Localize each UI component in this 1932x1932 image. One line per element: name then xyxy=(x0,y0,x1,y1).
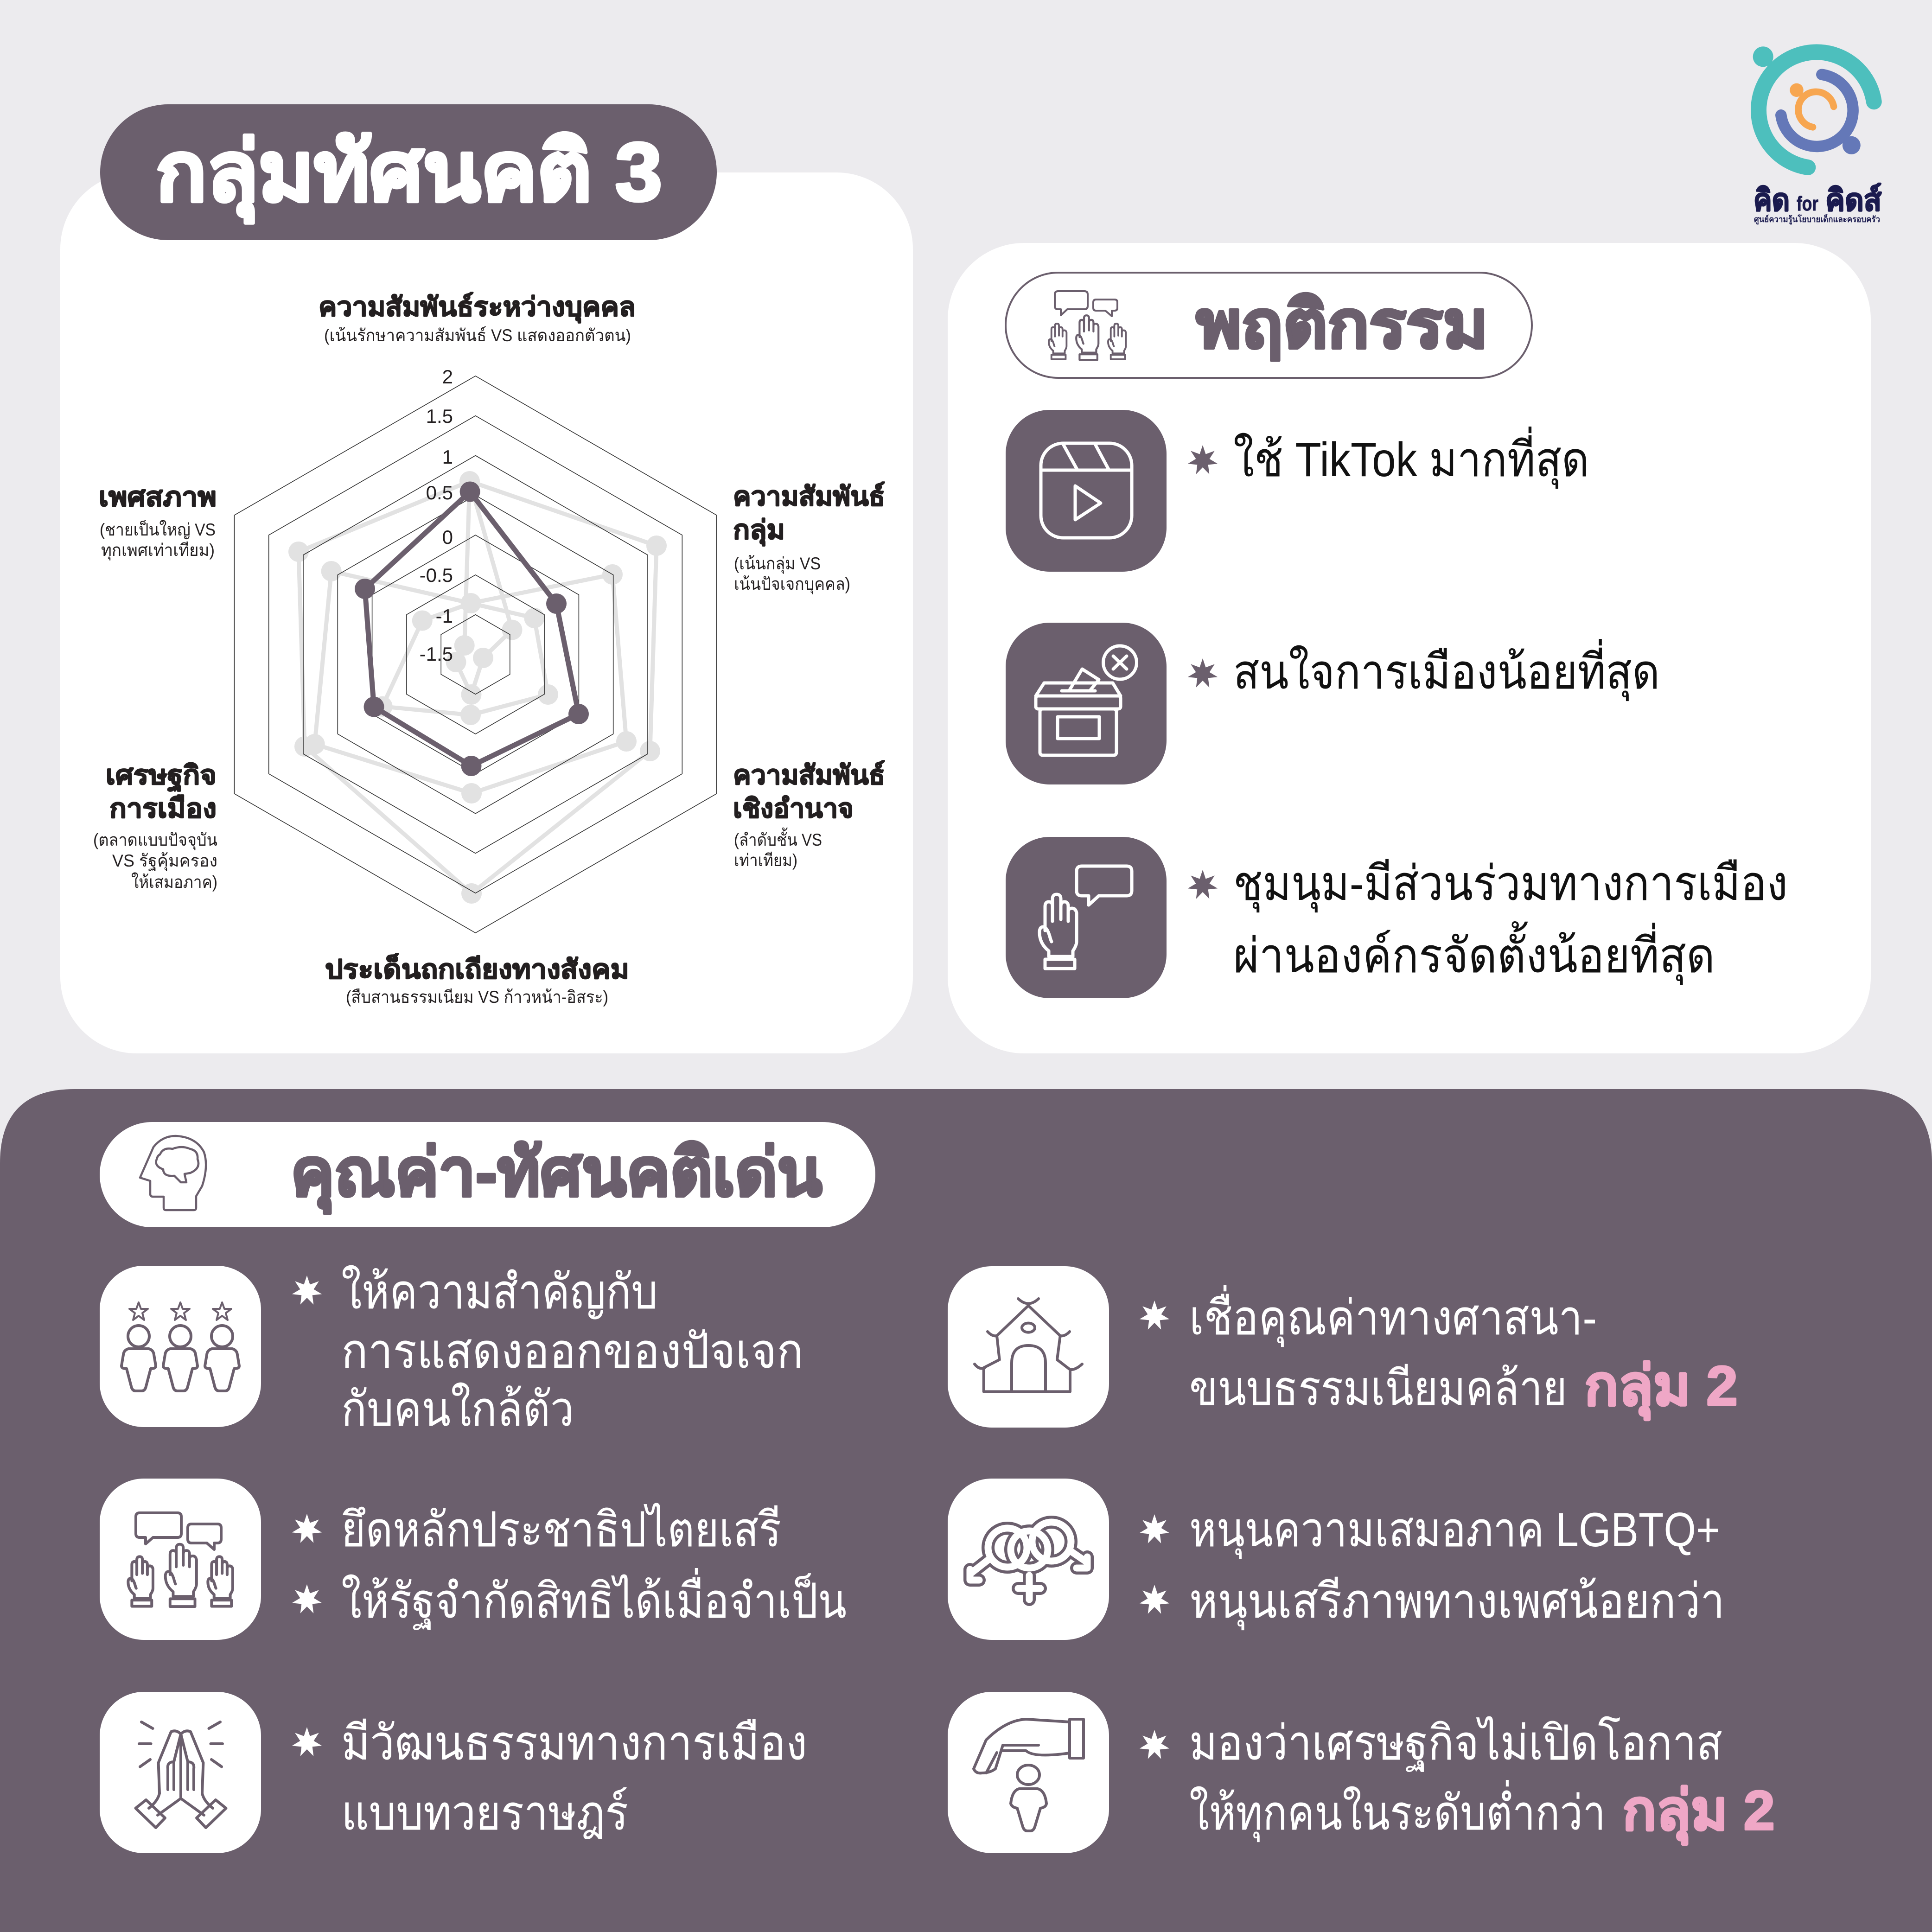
logo: for xyxy=(1797,192,1818,215)
text xyxy=(341,1265,803,1436)
star bullets xyxy=(1140,1514,1169,1614)
icon: gender symbols xyxy=(970,1522,1087,1600)
icon: three people with stars xyxy=(121,1302,239,1391)
value item: liberal democracy xyxy=(100,1479,847,1640)
radar label: top: ความสัมพันธ์ระหว่างบุคคล xyxy=(319,292,636,324)
text: สนใจการเมืองน้อยที่สุด xyxy=(1233,639,1660,701)
value item: self expression xyxy=(100,1265,803,1436)
heading: values: คุณค่า-ทัศนคติเด่น xyxy=(291,1136,822,1214)
radar chart: -0.5 xyxy=(420,564,453,586)
logo: คิดส์ xyxy=(1825,183,1882,217)
behaviour item: protest xyxy=(1006,837,1788,998)
icon: head with brain xyxy=(140,1136,206,1210)
icon: video reel xyxy=(1041,443,1132,538)
radar chart: -1.5 xyxy=(420,643,453,665)
star bullet xyxy=(1140,1730,1169,1759)
radar label: lower right xyxy=(733,760,885,870)
text xyxy=(1189,1503,1725,1631)
radar label: lower right: (ลำดับชั้น VS xyxy=(734,827,822,849)
icon: hand over person xyxy=(974,1719,1084,1831)
radar chart: -1 xyxy=(436,605,453,627)
radar label: lower left xyxy=(93,760,217,892)
radar label: lower left: (ตลาดแบบปัจจุบัน xyxy=(93,830,217,850)
radar chart: 0.5 xyxy=(426,482,453,504)
values heading pill xyxy=(100,1122,875,1227)
text xyxy=(1189,1285,1738,1421)
text: หนุนเสรีภาพทางเพศน้อยกว่า xyxy=(1189,1575,1725,1631)
text: ให้ความสำคัญกับ xyxy=(341,1265,658,1320)
text: ผ่านองค์กรจัดตั้งน้อยที่สุด xyxy=(1233,921,1715,985)
radar chart xyxy=(234,366,717,933)
radar label: upper right: เน้นปัจเจกบุคคล) xyxy=(734,574,850,594)
radar label: lower right: เชิงอำนาจ xyxy=(733,794,854,823)
radar label: lower left: VS รัฐคุ้มครอง xyxy=(112,851,217,871)
text: เชื่อคุณค่าทางศาสนา- xyxy=(1189,1285,1597,1347)
radar label: upper right: กลุ่ม xyxy=(733,515,785,547)
radar label: lower left: การเมือง xyxy=(109,794,217,823)
behaviour item: TikTok xyxy=(1006,410,1589,572)
panel: radar chart card xyxy=(60,172,913,1053)
text: ใช้ TikTok มากที่สุด xyxy=(1233,427,1589,489)
text: ให้ทุกคนในระดับต่ำกว่า xyxy=(1189,1780,1606,1843)
radar chart: 0 xyxy=(442,526,453,548)
star bullets xyxy=(292,1514,322,1613)
text: การแสดงออกของปัจเจก xyxy=(341,1325,803,1378)
radar chart: 1.5 xyxy=(426,405,453,427)
title: กลุ่มทัศนคติ 3 xyxy=(156,126,662,223)
title xyxy=(100,104,717,240)
text xyxy=(1233,857,1788,985)
value item: subject political culture xyxy=(100,1692,807,1853)
star bullet xyxy=(1188,445,1218,474)
behaviour heading pill xyxy=(1006,273,1532,378)
icon: ballot box xyxy=(1036,646,1137,755)
radar label: bottom: ประเด็นถกเถียงทางสังคม xyxy=(325,953,629,984)
radar label: upper right: (เน้นกลุ่ม VS xyxy=(734,554,821,574)
icon: temple xyxy=(975,1299,1082,1392)
radar label: upper left: (ชายเป็นใหญ่ VS xyxy=(100,519,216,540)
panel: values section xyxy=(0,1089,1932,1932)
star bullet xyxy=(1188,658,1218,688)
text: กลุ่ม 2 xyxy=(1622,1779,1775,1845)
radar label: lower right: ความสัมพันธ์ xyxy=(733,760,885,790)
text: แบบทวยราษฎร์ xyxy=(341,1786,628,1840)
icon: hands and bubbles xyxy=(128,1513,233,1607)
star bullet xyxy=(292,1727,322,1756)
text: ยึดหลักประชาธิปไตยเสรี xyxy=(341,1503,781,1557)
radar label: upper right xyxy=(733,482,885,594)
radar label: upper right: ความสัมพันธ์ xyxy=(733,482,885,511)
star bullet xyxy=(292,1275,322,1305)
text: กับคนใกล้ตัว xyxy=(341,1383,574,1436)
panel: behaviour card xyxy=(948,243,1871,1053)
logo: ศูนย์ความรู้นโยบายเด็กและครอบครัว xyxy=(1754,214,1880,225)
radar label: lower left: ให้เสมอภาค) xyxy=(131,872,217,892)
text: ให้รัฐจำกัดสิทธิได้เมื่อจำเป็น xyxy=(341,1568,847,1631)
text: มองว่าเศรษฐกิจไม่เปิดโอกาส xyxy=(1189,1716,1722,1773)
radar label: top: (เน้นรักษาความสัมพันธ์ VS แสดงออกตัวตน) xyxy=(324,326,631,345)
icon: praying hands xyxy=(135,1722,226,1828)
value item: religion and tradition xyxy=(948,1266,1738,1428)
radar label: bottom xyxy=(325,953,629,1007)
radar label: bottom: (สืบสานธรรมเนียม VS ก้าวหน้า-อิสระ) xyxy=(346,988,608,1007)
text: มีวัฒนธรรมทางการเมือง xyxy=(341,1716,807,1770)
radar label: upper left: ทุกเพศเท่าเทียม) xyxy=(101,541,215,561)
icon: raised hands with speech bubbles xyxy=(1049,291,1126,360)
text: ขนบธรรมเนียมคล้าย xyxy=(1189,1362,1567,1416)
radar label: lower left: เศรษฐกิจ xyxy=(106,760,217,792)
text xyxy=(341,1503,847,1631)
radar label: upper left xyxy=(99,482,217,561)
radar chart: 1 xyxy=(442,446,453,468)
star bullet xyxy=(1188,870,1218,899)
logo: คิด xyxy=(1753,183,1790,217)
radar label: lower right: เท่าเทียม) xyxy=(734,851,797,870)
behaviour item: politics interest xyxy=(1006,623,1660,784)
text xyxy=(341,1716,807,1840)
radar label: top xyxy=(319,292,636,345)
text: กลุ่ม 2 xyxy=(1584,1355,1738,1421)
star bullet xyxy=(1140,1301,1169,1330)
value item: LGBTQ xyxy=(948,1479,1725,1640)
radar chart: 2 xyxy=(442,366,453,388)
text xyxy=(1189,1716,1775,1845)
icon: hand and bubble xyxy=(1039,866,1132,969)
radar label: upper left: เพศสภาพ xyxy=(99,482,217,512)
text: หนุนความเสมอภาค LGBTQ+ xyxy=(1189,1503,1720,1559)
heading: behaviour: พฤติกรรม xyxy=(1196,288,1488,362)
text: ชุมนุม-มีส่วนร่วมทางการเมือง xyxy=(1233,857,1788,913)
value item: economic opportunity xyxy=(948,1692,1775,1853)
logo xyxy=(1753,46,1882,225)
